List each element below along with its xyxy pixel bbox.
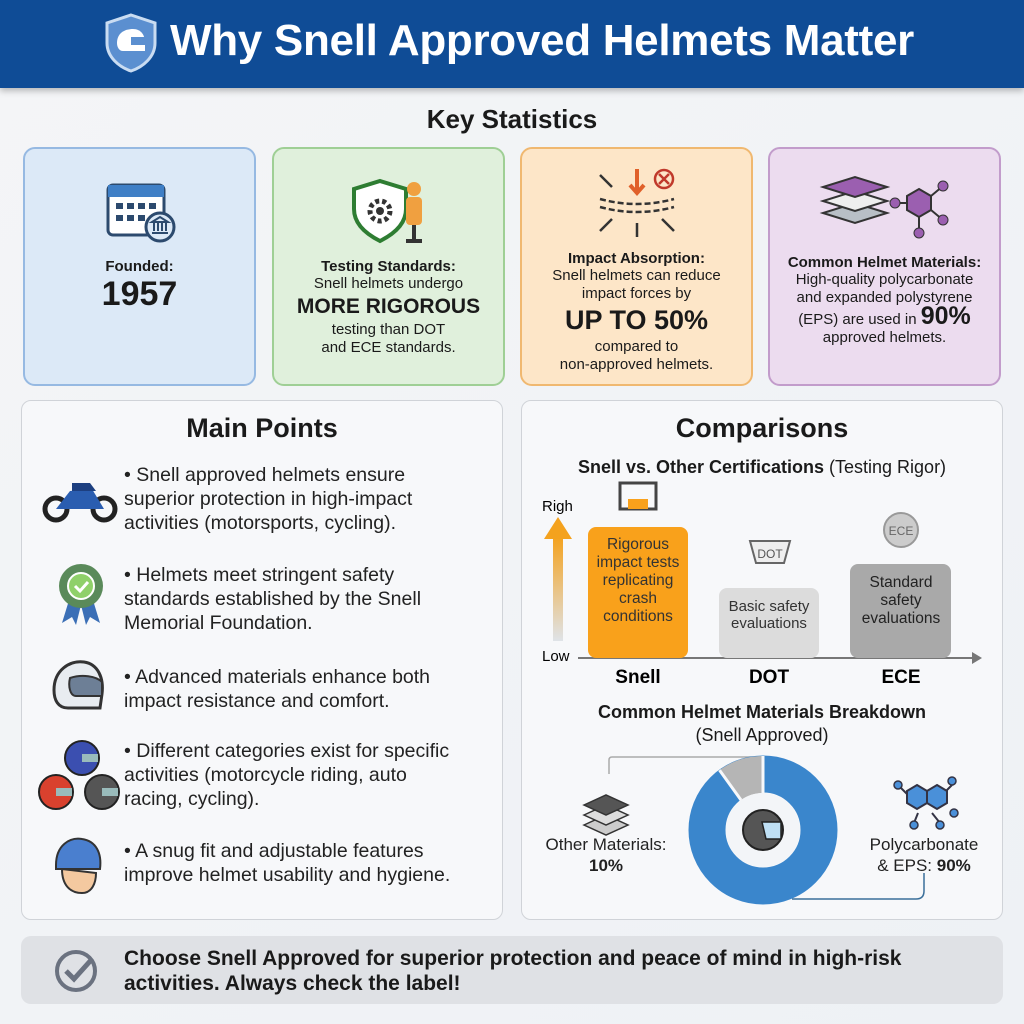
bar chart: Rigorous	[607, 536, 669, 553]
chart subtitle: Snell vs. Other Certifications (Testing Rigor)	[578, 457, 946, 477]
donut chart	[546, 756, 978, 904]
donut chart: & EPS: 90%	[877, 856, 971, 875]
point 3: • Advanced materials enhance both impact resistance and comfort.	[124, 666, 430, 712]
card: materials	[768, 147, 1001, 386]
icon: helmets group	[38, 740, 120, 810]
card: founded: 1957	[102, 275, 177, 313]
callout: bottom banner	[21, 936, 1003, 1004]
point 2: • Helmets meet stringent safety standards established by the Snell Memorial Foundation.	[124, 564, 421, 634]
bar chart: evaluations	[862, 610, 940, 627]
heading: key statistics: Key Statistics	[427, 104, 597, 134]
banner text: activities. Always check the label!	[124, 972, 461, 995]
icon: check circle	[55, 950, 97, 992]
heading: main points: Main Points	[186, 413, 338, 443]
bar chart: safety	[880, 592, 922, 609]
icon: shield gear dummy	[352, 178, 422, 244]
bar chart: ECE	[889, 524, 913, 538]
card: impact absorption: compared to	[595, 338, 678, 355]
donut chart: Other Materials:	[546, 835, 666, 854]
icon: helmet	[52, 660, 104, 710]
card: impact absorption: Impact Absorption:	[568, 250, 705, 267]
icon: motorcycle	[42, 483, 118, 522]
card: impact absorption: non-approved helmets.	[560, 356, 713, 373]
bar chart: conditions	[603, 608, 673, 625]
bar chart: Snell	[615, 667, 661, 688]
card: impact absorption	[520, 147, 753, 386]
card: testing standards	[272, 147, 505, 386]
bar chart: replicating	[603, 572, 673, 589]
card: impact absorption: UP TO 50%	[565, 305, 708, 335]
bar chart: impact tests	[597, 554, 680, 571]
banner text: Choose Snell Approved for superior protection and peace of mind in high-risk	[124, 947, 901, 970]
card: materials: High-quality polycarbonate	[796, 271, 973, 288]
card: materials: approved helmets.	[823, 329, 946, 346]
icon: shield helmet	[106, 13, 156, 73]
bar chart: crash	[619, 590, 657, 607]
bar chart: Low	[542, 648, 570, 665]
card: founded	[23, 147, 256, 386]
donut subtitle	[598, 702, 926, 745]
card: testing standards: Snell helmets undergo	[314, 275, 463, 292]
bar chart: Basic safety	[729, 598, 810, 615]
card: impact absorption: impact forces by	[582, 285, 691, 302]
point 1: • Snell approved helmets ensure superior protection in high-impact activities (motorsports, cycling).	[124, 464, 412, 534]
icon: badge	[59, 564, 103, 625]
bar chart: DOT	[749, 667, 789, 688]
heading: comparisons: Comparisons	[676, 413, 848, 443]
icon: impact arrows	[599, 168, 675, 237]
bar chart: Righ	[542, 498, 573, 515]
donut chart: 10%	[589, 856, 623, 875]
point 5: • A snug fit and adjustable features improve helmet usability and hygiene.	[124, 840, 450, 886]
card: testing standards: testing than DOT	[332, 321, 445, 338]
card: founded: Founded:	[105, 258, 174, 275]
card: testing standards: MORE RIGOROUS	[297, 295, 480, 318]
card: materials: and expanded polystyrene	[797, 289, 972, 306]
panel: main points	[21, 400, 503, 920]
icon: calendar	[106, 184, 176, 242]
donut subtitle: (Snell Approved)	[695, 725, 829, 745]
title: Why Snell Approved Helmets Matter	[170, 16, 914, 65]
icon: head with helmet	[55, 838, 102, 894]
card: testing standards: Testing Standards:	[321, 258, 456, 275]
point 4: • Different categories exist for specific activities (motorcycle riding, auto racing, cycling).	[124, 740, 449, 810]
banner text	[124, 947, 902, 995]
bar chart: Standard	[870, 574, 932, 591]
card: materials: (EPS) are used in 90%	[798, 302, 971, 330]
card: impact absorption: Snell helmets can reduce	[552, 267, 721, 284]
bar chart: evaluations	[731, 615, 807, 632]
bar chart: ECE	[881, 667, 921, 688]
header bar	[0, 0, 1024, 88]
bar chart: DOT	[757, 547, 783, 561]
card: materials: Common Helmet Materials:	[788, 254, 981, 271]
card: testing standards: and ECE standards.	[321, 339, 456, 356]
bar chart	[542, 482, 982, 688]
donut subtitle: Common Helmet Materials Breakdown	[598, 702, 926, 722]
panel: comparisons	[521, 400, 1003, 920]
icon: layers molecule	[820, 176, 948, 238]
donut chart: Polycarbonate	[870, 835, 978, 854]
